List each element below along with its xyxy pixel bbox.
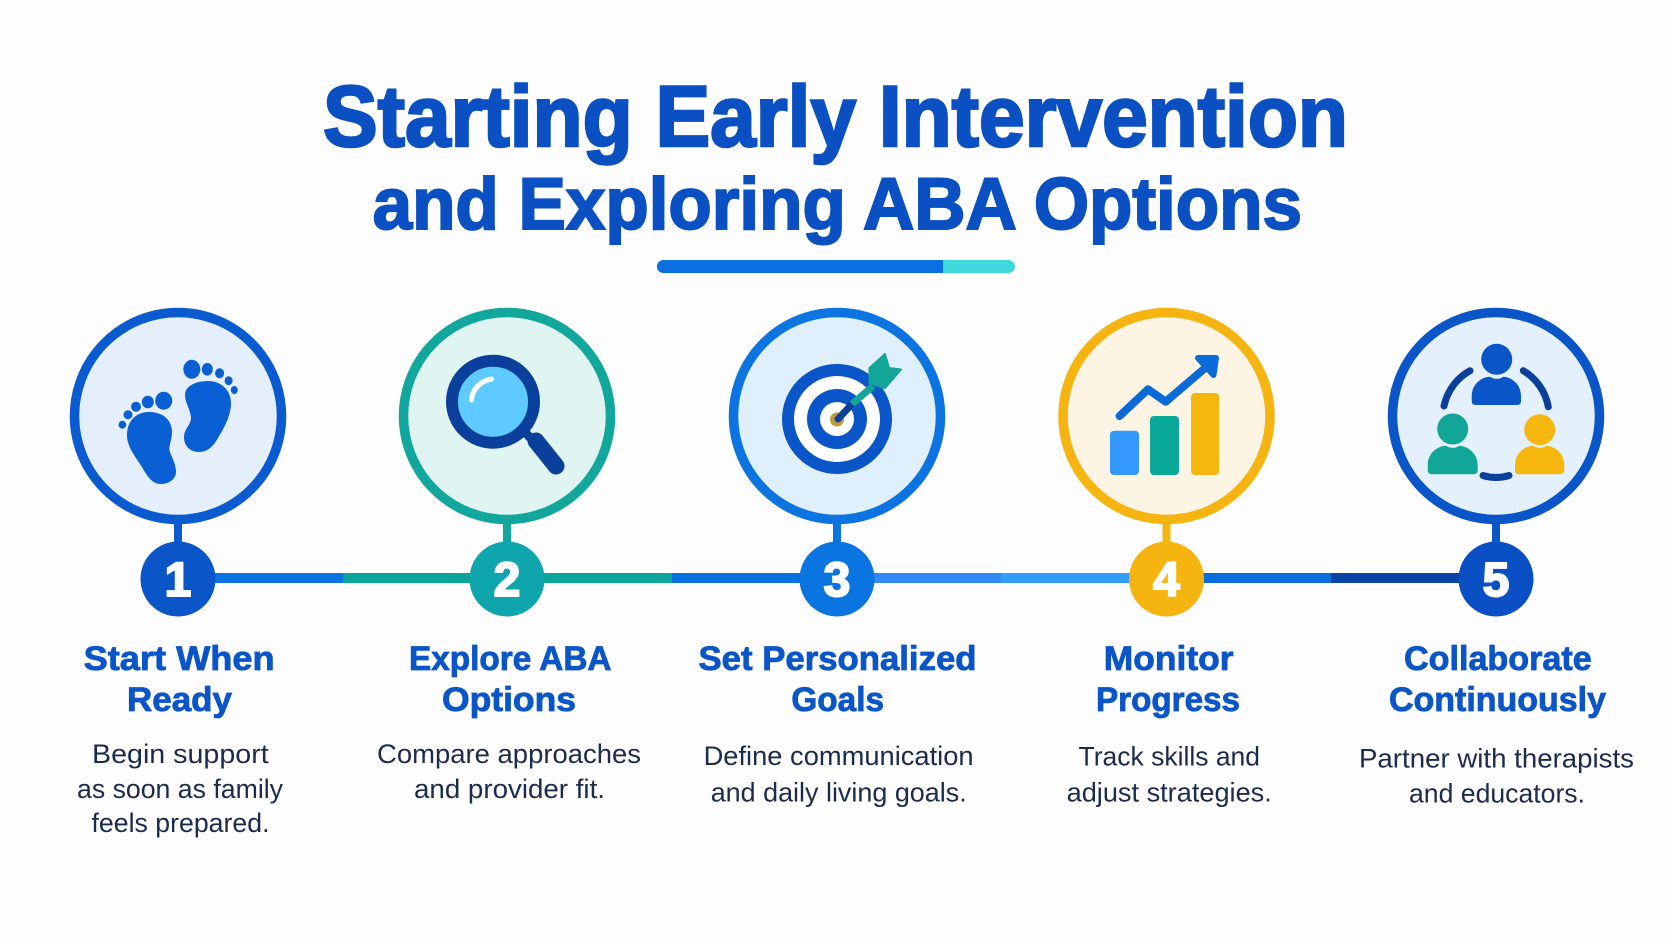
heading 2: Options bbox=[442, 681, 576, 719]
heading 3 bbox=[698, 640, 976, 719]
icon circle: magnifying glass bbox=[404, 312, 610, 550]
description 2: Compare approaches bbox=[377, 739, 641, 769]
heading 5: Collaborate bbox=[1404, 640, 1592, 678]
heading 1: Start When bbox=[84, 640, 275, 678]
icon circle: team of three people bbox=[1392, 312, 1600, 550]
heading 1: Ready bbox=[127, 681, 232, 719]
number badge 1 bbox=[140, 542, 216, 616]
description 5: and educators. bbox=[1409, 779, 1585, 809]
description 1: feels prepared. bbox=[92, 808, 270, 838]
timeline connector bbox=[178, 573, 1496, 583]
description 3: Define communication bbox=[704, 741, 974, 771]
heading 4 bbox=[1096, 640, 1240, 719]
number badge 3 bbox=[800, 542, 874, 616]
step 1: Start When Ready bbox=[74, 312, 283, 838]
heading 2 bbox=[409, 640, 612, 719]
description 2 bbox=[377, 739, 641, 804]
title: and Exploring ABA Options bbox=[373, 164, 1302, 245]
description 5: Partner with therapists bbox=[1359, 744, 1634, 774]
description 2: and provider fit. bbox=[414, 774, 605, 804]
description 1: as soon as family bbox=[77, 774, 283, 804]
number badge 4: 4 bbox=[1153, 554, 1180, 607]
number badge 5 bbox=[1458, 542, 1534, 616]
heading 3: Set Personalized bbox=[698, 640, 976, 678]
number badge 3: 3 bbox=[824, 554, 850, 607]
icon circle: footprints bbox=[74, 312, 282, 550]
step 3: Set Personalized Goals bbox=[698, 312, 976, 808]
number badge 2 bbox=[470, 542, 544, 616]
heading 3: Goals bbox=[791, 681, 884, 719]
heading 4: Progress bbox=[1096, 681, 1240, 719]
description 5 bbox=[1359, 744, 1634, 809]
title: Starting Early Intervention bbox=[323, 69, 1348, 165]
description 4 bbox=[1067, 742, 1272, 808]
number badge 1: 1 bbox=[165, 554, 191, 607]
heading 2: Explore ABA bbox=[409, 640, 612, 678]
step 2: Explore ABA Options bbox=[377, 312, 641, 804]
description 1: Begin support bbox=[92, 739, 269, 769]
heading 5: Continuously bbox=[1389, 681, 1606, 719]
description 3: and daily living goals. bbox=[711, 778, 967, 808]
description 1 bbox=[77, 739, 283, 838]
heading 4: Monitor bbox=[1104, 640, 1234, 678]
description 4: Track skills and bbox=[1078, 742, 1260, 772]
heading 1 bbox=[84, 640, 275, 719]
description 3 bbox=[704, 741, 974, 808]
icon circle: target with dart bbox=[734, 312, 940, 550]
title bbox=[323, 69, 1348, 245]
number badge 5: 5 bbox=[1483, 554, 1509, 607]
step 4: Monitor Progress bbox=[1063, 312, 1272, 808]
title underline bbox=[657, 260, 1015, 273]
number badge 2: 2 bbox=[494, 554, 520, 607]
heading 5 bbox=[1389, 640, 1606, 719]
icon circle: rising bar chart bbox=[1063, 312, 1270, 550]
number badge 4 bbox=[1129, 542, 1204, 616]
description 4: adjust strategies. bbox=[1067, 778, 1272, 808]
step 5: Collaborate Continuously bbox=[1359, 312, 1634, 809]
